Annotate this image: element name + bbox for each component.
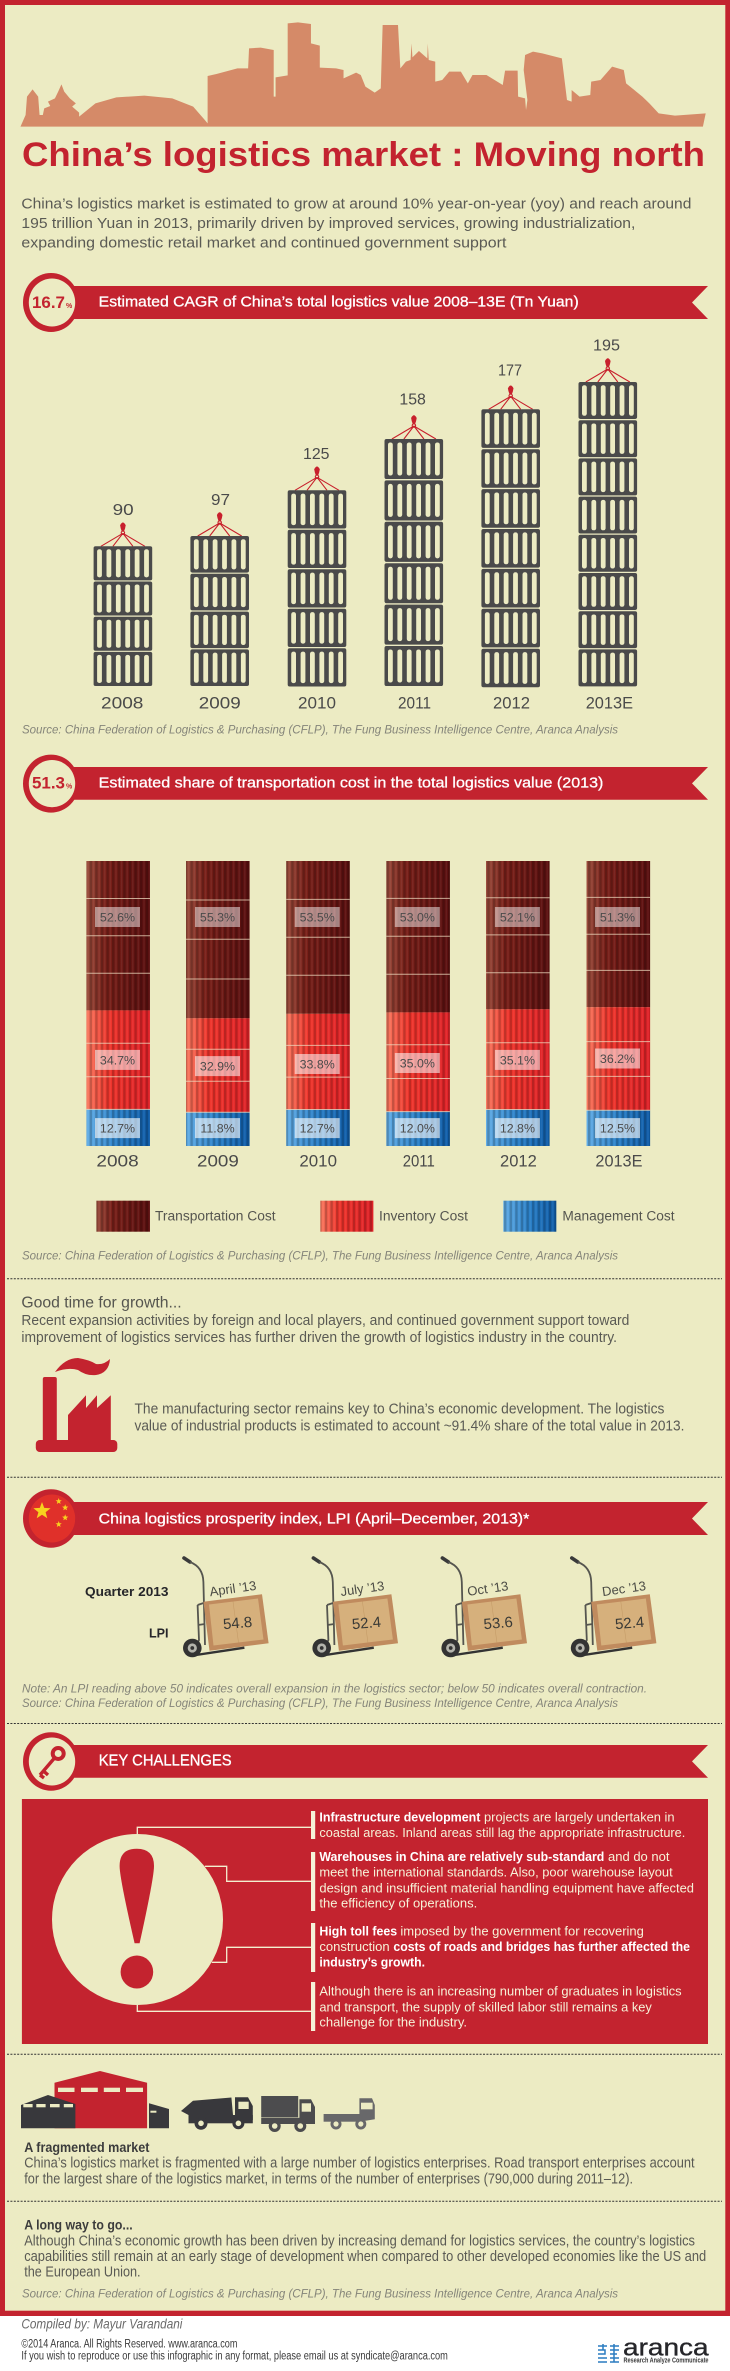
challenge: skilled labor: and transport, the supply of skilled labor still remains a key <box>319 1999 652 2014</box>
logo: aranca: aranca <box>623 2335 709 2362</box>
bar 2011: 12.0% <box>400 1122 435 1136</box>
intro text: China’s logistics market is estimated to grow at around 10% year-on-year (yoy) and reach around <box>21 197 691 213</box>
bar 2010: 2010 <box>299 1151 337 1170</box>
bar 2009: 32.9% <box>200 1060 235 1074</box>
icon: city skyline <box>20 22 706 127</box>
bar 2012: 2012 <box>500 1151 537 1170</box>
hand truck: April '13: 54.8 <box>222 1614 253 1633</box>
bar 2010 <box>286 861 350 1170</box>
bar 2009 <box>186 861 250 1170</box>
header: CAGR ribbon: Estimated CAGR of China’s total logistics value 2008–13E (Tn Yuan) <box>99 295 579 311</box>
text block: a fragmented market: for the largest share of the logistics market, in terms of the number of enterprises (790,000 during 2011–12). <box>24 2171 633 2187</box>
header: transportation share ribbon: 51.3 <box>32 775 65 793</box>
header: transportation share ribbon <box>23 755 708 813</box>
bar 2013E: 51.3% <box>600 910 635 924</box>
challenge: warehouses: and do not <box>608 1849 670 1864</box>
source note: closing: Source: China Federation of Logistics & Purchasing (CFLP), The Fung Business Intelligence Centre, Aranca Analysis <box>22 2287 618 2301</box>
text block: a long way to go <box>24 2217 706 2281</box>
challenge: infrastructure <box>319 1810 685 1840</box>
column 2013E <box>578 338 637 713</box>
text block: manufacturing sector: The manufacturing sector remains key to China’s economic development. The logistics <box>134 1401 664 1417</box>
challenge: toll fees: High toll fees <box>319 1923 397 1938</box>
bar 2012: 35.1% <box>500 1053 535 1067</box>
challenge: infrastructure: coastal areas. Inland areas still lag the appropriate infrastructure. <box>319 1825 685 1840</box>
text block: good time for growth <box>21 1294 629 1346</box>
hand truck: Dec '13: Dec ’13 <box>601 1578 647 1599</box>
text block: a long way to go: A long way to go... <box>24 2217 133 2232</box>
header: key challenges ribbon with key icon: KEY CHALLENGES <box>99 1753 232 1770</box>
challenge: warehouses: the efficiency of operations. <box>319 1896 477 1911</box>
challenge: skilled labor <box>319 1984 682 2030</box>
header: key challenges ribbon with key icon <box>23 1732 708 1791</box>
legend <box>96 1201 675 1232</box>
note and source: LPI: Source: China Federation of Logistics & Purchasing (CFLP), The Fung Business Intelligence Centre, Aranca Analysis <box>22 1696 618 1710</box>
challenge: toll fees: costs of roads and bridges has further affected the <box>393 1939 690 1954</box>
bar 2012 <box>486 861 550 1170</box>
text block: good time for growth: Recent expansion activities by foreign and local players, and continued government support toward <box>21 1313 629 1329</box>
intro text <box>21 197 691 252</box>
bar 2008: 2008 <box>96 1151 139 1170</box>
hand truck: July '13: 52.4 <box>351 1614 382 1633</box>
legend: Management Cost <box>562 1209 675 1224</box>
hand truck: April '13 <box>183 1558 269 1657</box>
text block: good time for growth: Good time for growth... <box>21 1294 182 1311</box>
source note: CAGR chart: Source: China Federation of Logistics & Purchasing (CFLP), The Fung Business Intelligence Centre, Aranca Analysis <box>22 723 618 737</box>
bar 2013E <box>586 861 650 1170</box>
row labels: quarter and LPI: LPI <box>149 1625 168 1640</box>
column 2009: 2009 <box>199 694 241 713</box>
bar 2009: 2009 <box>197 1151 239 1170</box>
bar 2013E: 12.5% <box>600 1122 635 1136</box>
note and source: LPI <box>22 1682 647 1710</box>
row labels: quarter and LPI <box>85 1584 168 1640</box>
challenge: toll fees: construction <box>319 1939 390 1954</box>
text block: manufacturing sector <box>134 1401 684 1434</box>
note and source: LPI: Note: An LPI reading above 50 indicates overall expansion in the logistics sector; below 50 indicates overall contraction. <box>22 1682 647 1696</box>
bar 2010: 53.5% <box>300 910 335 924</box>
legend: Transportation Cost <box>155 1209 276 1224</box>
header: transportation share ribbon: Estimated share of transportation cost in the total logistics value (2013) <box>99 776 603 792</box>
column 2012: 177 <box>498 363 522 380</box>
challenge: toll fees: imposed by the government for recovering <box>400 1923 644 1938</box>
chart: stacked cost bars <box>86 861 650 1170</box>
text block: a fragmented market: A fragmented market <box>24 2140 150 2155</box>
bar 2011: 35.0% <box>400 1056 435 1070</box>
icon: box truck <box>261 2096 315 2132</box>
text block: good time for growth: improvement of logistics services has further driven the growth of logistics industry in the country. <box>21 1330 617 1346</box>
icon: dump truck <box>181 2097 253 2129</box>
column 2010: 2010 <box>298 694 336 713</box>
column 2010 <box>288 446 346 713</box>
icon: factory <box>36 1358 117 1452</box>
challenge: skilled labor: challenge for the industry. <box>319 2015 467 2030</box>
hand truck: Oct '13: Oct ’13 <box>466 1578 509 1599</box>
bar 2010: 12.7% <box>300 1122 335 1136</box>
header: transportation share ribbon: % <box>66 784 73 791</box>
header: CAGR ribbon: 16.7 <box>32 294 65 312</box>
title: China’s logistics market : Moving north <box>22 136 705 174</box>
text block: a long way to go: the European Union. <box>24 2265 141 2281</box>
icon: exclamation mark in circle <box>52 1834 223 2005</box>
column 2011 <box>384 392 443 713</box>
bar 2008: 12.7% <box>100 1122 135 1136</box>
text block: a fragmented market <box>24 2140 695 2187</box>
bar 2009: 11.8% <box>200 1122 235 1136</box>
footer: copyright <box>21 2339 448 2363</box>
column 2011: 2011 <box>398 694 431 713</box>
bar 2008 <box>86 861 150 1170</box>
bar 2008: 34.7% <box>100 1053 135 1067</box>
column 2009: 97 <box>211 492 230 509</box>
bar 2013E: 36.2% <box>600 1052 635 1066</box>
challenge: warehouses: Warehouses in China are relatively sub-standard <box>319 1849 604 1864</box>
column 2008: 90 <box>113 502 134 519</box>
header: CAGR ribbon <box>23 273 708 332</box>
challenge: toll fees: industry’s growth. <box>319 1955 425 1970</box>
bar 2009: 55.3% <box>200 910 235 924</box>
hand truck: Oct '13: 53.6 <box>483 1614 513 1633</box>
bar 2012: 12.8% <box>500 1122 535 1136</box>
column 2008 <box>94 502 152 713</box>
challenge: warehouses <box>319 1849 694 1911</box>
bar 2013E: 2013E <box>595 1151 642 1170</box>
column 2013E: 195 <box>593 338 620 355</box>
icon: flatbed truck <box>324 2098 375 2130</box>
column 2010: 125 <box>303 446 330 463</box>
footer: copyright: If you wish to reproduce or use this infographic in any format, please email us at syndicate@aranca.com <box>21 2351 448 2363</box>
column 2012 <box>481 363 540 713</box>
bar 2012: 52.1% <box>500 910 535 924</box>
panel: key challenges <box>22 1799 708 2044</box>
footer: compiled by: Compiled by: Mayur Varandani <box>21 2316 183 2332</box>
intro text: 195 trillion Yuan in 2013, primarily driven by improved services, growing industrialization, <box>21 216 635 232</box>
hand truck: July '13 <box>312 1558 398 1657</box>
bar 2011 <box>386 861 450 1170</box>
footer: copyright: ©2014 Aranca. All Rights Reserved. www.aranca.com <box>21 2339 237 2351</box>
logo: aranca <box>598 2335 709 2365</box>
header: prosperity index ribbon with China flag <box>23 1489 708 1548</box>
bar 2011: 2011 <box>403 1151 435 1170</box>
bar 2011: 53.0% <box>400 910 435 924</box>
hand truck: Oct '13 <box>441 1558 527 1657</box>
intro text: expanding domestic retail market and continued government support <box>21 236 506 252</box>
column 2013E: 2013E <box>586 694 633 713</box>
logo: aranca: Research Analyze Communicate <box>624 2358 709 2365</box>
source note: cost chart: Source: China Federation of Logistics & Purchasing (CFLP), The Fung Business Intelligence Centre, Aranca Analysis <box>22 1248 618 1262</box>
challenge: skilled labor: Although there is an increasing number of graduates in logistics <box>319 1984 682 1999</box>
chart: container stacks of logistics value <box>94 338 637 713</box>
header: CAGR ribbon: % <box>66 303 73 310</box>
hand truck: April '13: April ’13 <box>209 1578 257 1599</box>
row labels: quarter and LPI: Quarter 2013 <box>85 1584 168 1599</box>
icon: warehouses <box>21 2071 169 2128</box>
challenge: infrastructure: Infrastructure development <box>319 1810 481 1825</box>
hand truck: July '13: July ’13 <box>340 1578 385 1599</box>
challenge: infrastructure: projects are largely undertaken in <box>484 1810 675 1825</box>
column 2011: 158 <box>399 392 426 409</box>
legend: Inventory Cost <box>379 1209 468 1224</box>
column 2008: 2008 <box>101 694 143 713</box>
challenge: toll fees <box>319 1923 690 1970</box>
text block: manufacturing sector: value of industrial products is estimated to account ~91.4% share of the total value in 2013. <box>134 1418 684 1434</box>
hand truck: Dec '13: 52.4 <box>614 1614 645 1633</box>
column 2012: 2012 <box>493 694 530 713</box>
challenge: warehouses: meet the international standards. Also, poor warehouse layout <box>319 1865 673 1880</box>
column 2009 <box>190 492 249 713</box>
challenge: warehouses: design and insufficient material handling equipment have affected <box>319 1880 694 1895</box>
hand truck: Dec '13 <box>571 1558 656 1657</box>
header: prosperity index ribbon with China flag: China logistics prosperity index, LPI (April–December, 2013)* <box>99 1511 530 1527</box>
bar 2008: 52.6% <box>100 910 135 924</box>
bar 2010: 33.8% <box>300 1058 335 1072</box>
